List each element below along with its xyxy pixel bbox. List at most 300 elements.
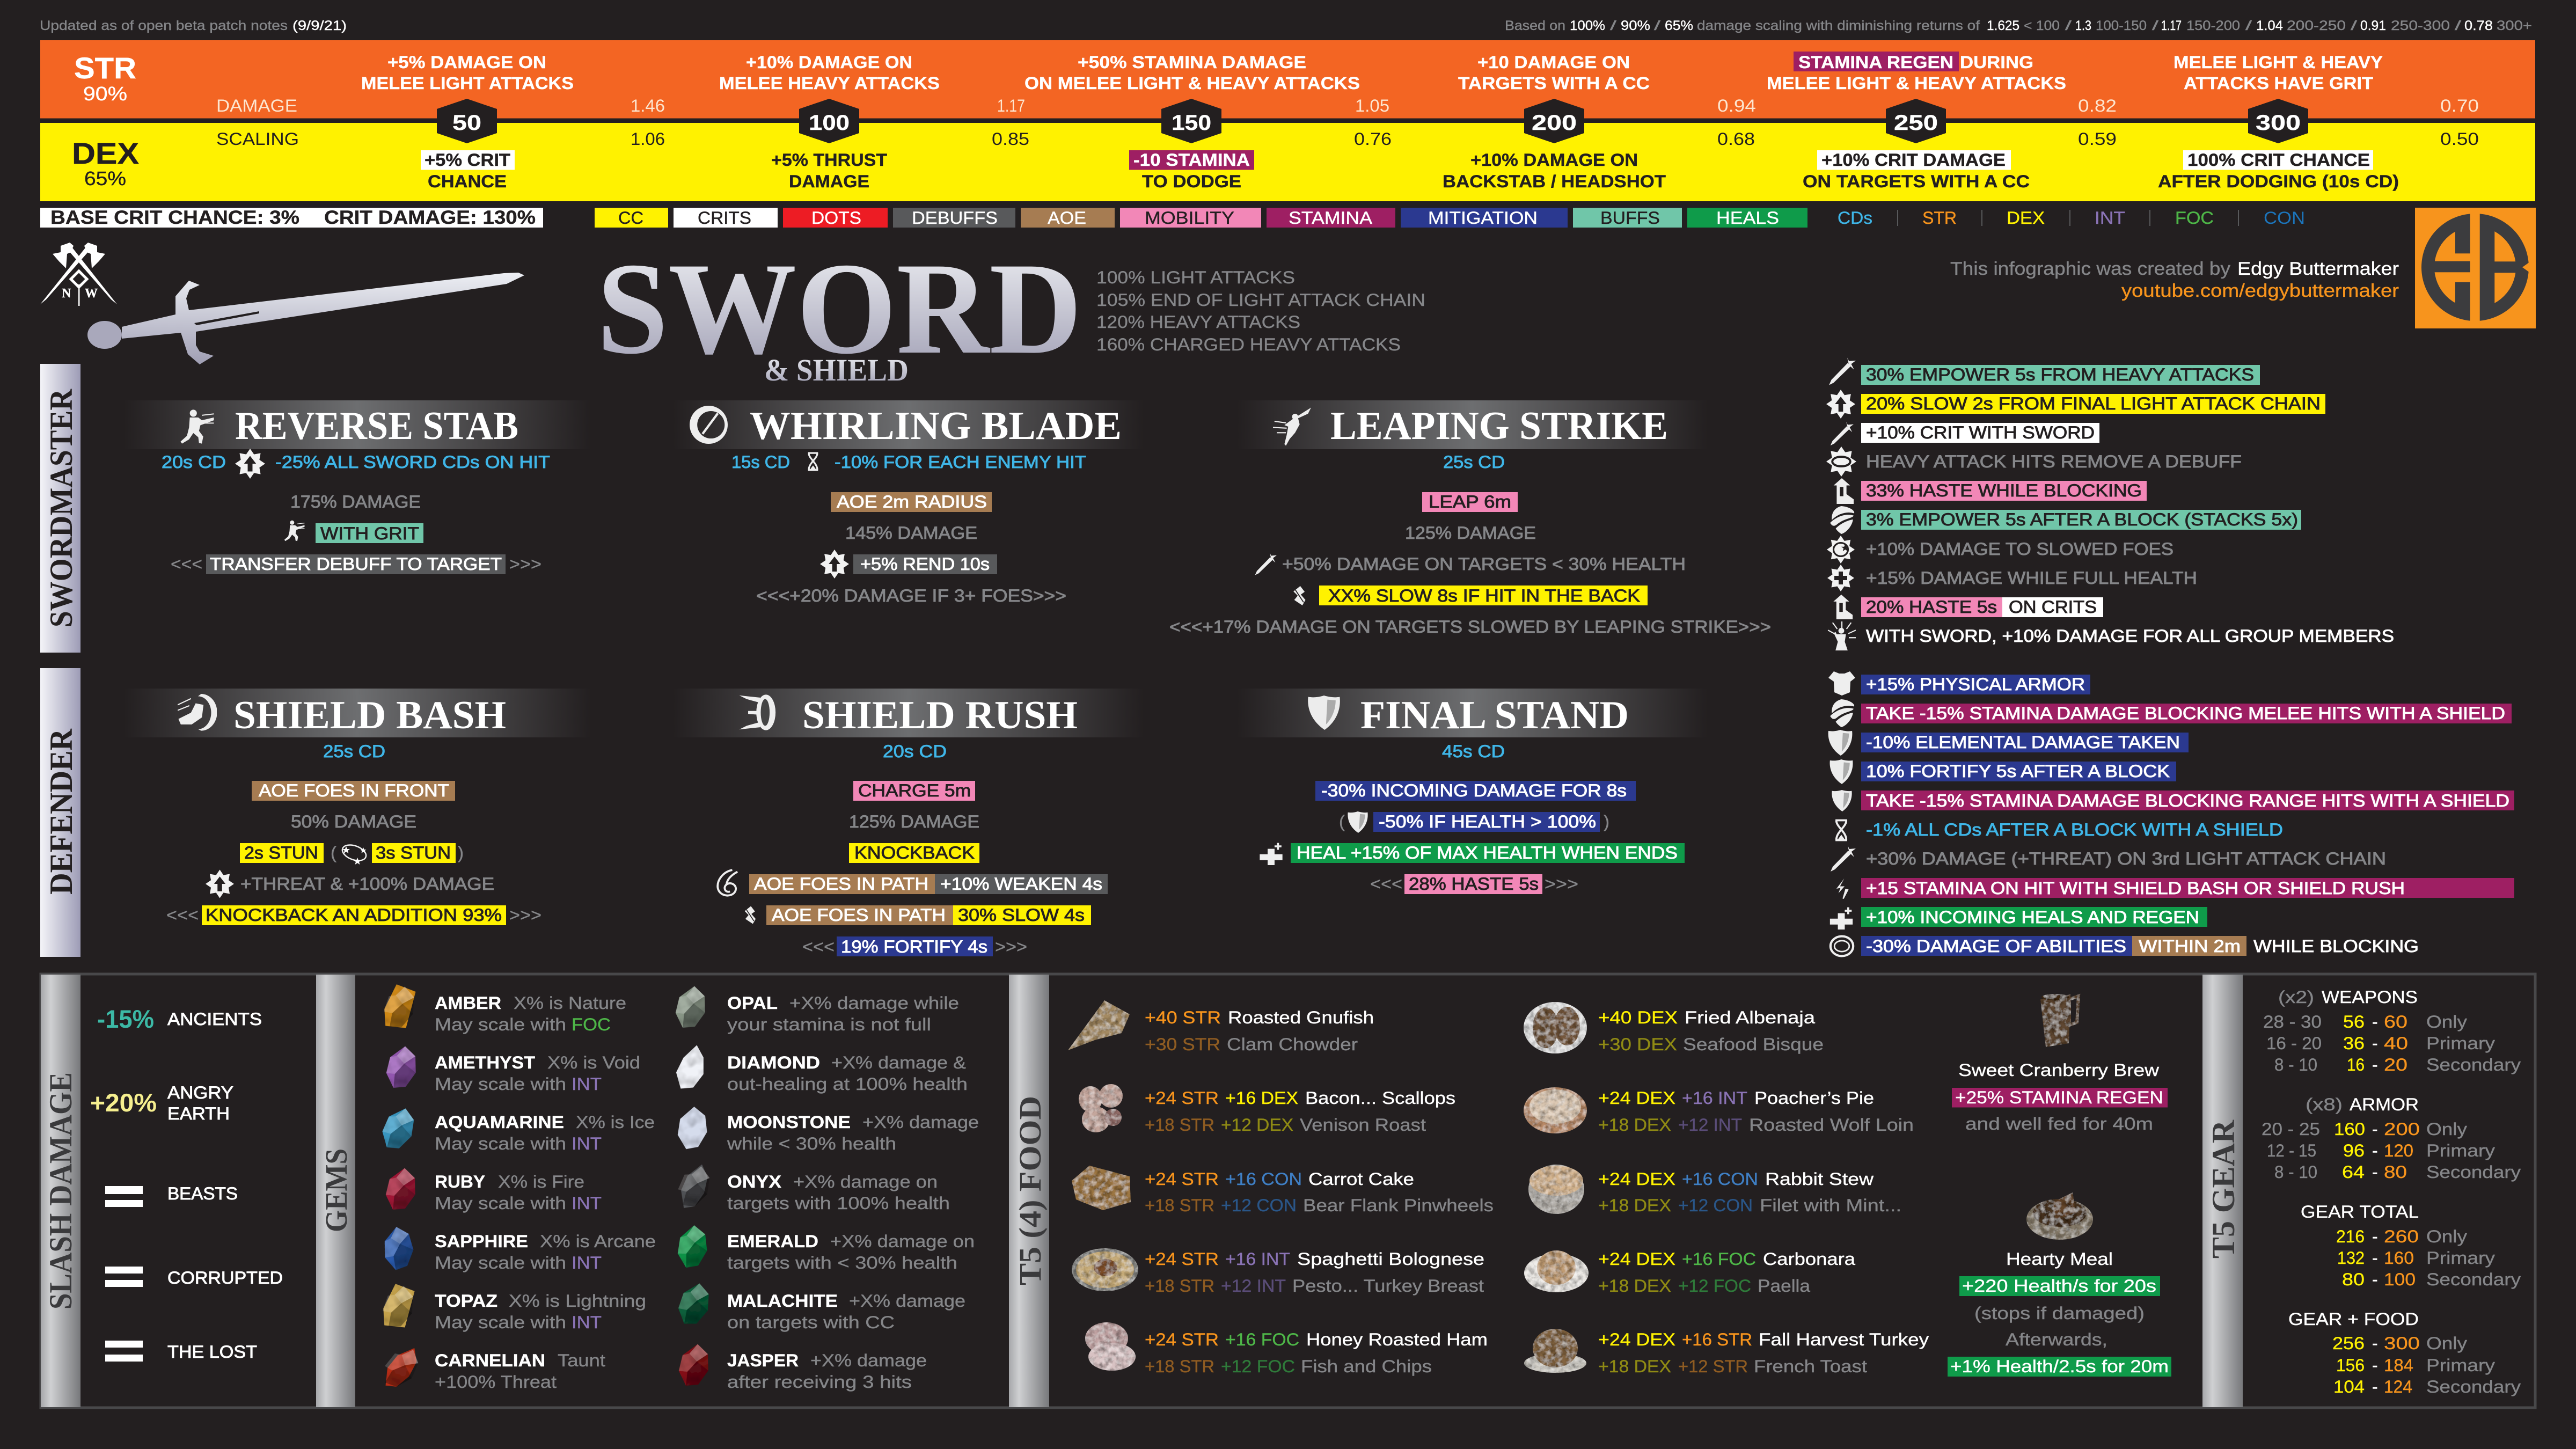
cooldown: 45s CD bbox=[1442, 742, 1505, 761]
gem: diamond: DIAMOND bbox=[727, 1053, 820, 1072]
food row 1 left: +30 STR bbox=[1145, 1035, 1220, 1054]
food row 1 right bbox=[1598, 1008, 1824, 1054]
gear: total: 216 bbox=[2336, 1227, 2365, 1246]
base crit stats: BASE CRIT CHANCE: 3% bbox=[50, 207, 299, 228]
icon: leaping strike bbox=[1273, 408, 1311, 445]
charge line: CHARGE 5m bbox=[858, 781, 971, 800]
gem: sapphire: INT bbox=[572, 1253, 602, 1272]
DEX bonus 150 bbox=[1129, 150, 1254, 191]
gem: amethyst: AMETHYST bbox=[435, 1053, 535, 1072]
fortify line bbox=[802, 936, 1027, 956]
passive: melee stamina block bbox=[1830, 699, 2512, 727]
food row 3 left: +18 STR bbox=[1145, 1196, 1214, 1215]
gear: total: 100 bbox=[2384, 1270, 2416, 1289]
high health line bbox=[1339, 811, 1609, 833]
damage scaling note: / bbox=[1610, 18, 1616, 33]
food row 5 right: +18 DEX bbox=[1598, 1357, 1671, 1376]
upgrade line: <<<+17% DAMAGE ON TARGETS SLOWED BY LEAPING STRIKE>>> bbox=[1169, 617, 1771, 636]
hexagon 300 bbox=[2248, 99, 2308, 143]
DEX bonus 300: 100% CRIT CHANCE bbox=[2187, 150, 2370, 170]
gem: emerald bbox=[677, 1224, 975, 1272]
DEX label bbox=[72, 136, 139, 189]
gear: plus food: - bbox=[2372, 1377, 2378, 1396]
gem: amethyst: X% is Void bbox=[547, 1053, 640, 1072]
passive: crit with sword bbox=[1831, 422, 2099, 445]
gem: malachite: +X% damage bbox=[849, 1291, 965, 1311]
gem: aquamarine bbox=[378, 1104, 655, 1154]
gear: armor: Only bbox=[2426, 1119, 2467, 1139]
DEX bonus 200: +10% DAMAGE ON bbox=[1470, 150, 1638, 170]
STR bonus 300: MELEE LIGHT & HEAVY bbox=[2174, 53, 2383, 72]
gear: weapons: 20 bbox=[2384, 1055, 2407, 1074]
sweet cranberry brew bbox=[1952, 1060, 2168, 1133]
damage line: 175% DAMAGE bbox=[290, 492, 421, 511]
gem: amethyst: May scale with bbox=[435, 1074, 566, 1094]
food row 5 left: +18 STR bbox=[1145, 1357, 1214, 1376]
passive: elemental damage: -10% ELEMENTAL DAMAGE TAKEN bbox=[1866, 733, 2180, 752]
haste line bbox=[1370, 874, 1578, 894]
damage scaling note: 100-150 bbox=[2096, 18, 2147, 33]
STR bonus 150: +50% STAMINA DAMAGE bbox=[1078, 53, 1306, 72]
gear: armor: 8 - 10 bbox=[2274, 1162, 2317, 1182]
food row 5 left: +24 STR bbox=[1145, 1330, 1219, 1349]
hexagon 200 bbox=[1524, 99, 1584, 143]
sweet cranberry brew: and well fed for 40m bbox=[1965, 1114, 2153, 1133]
gear: plus food: 256 bbox=[2332, 1334, 2365, 1353]
knockback line bbox=[166, 905, 541, 925]
food row 4 left: Spaghetti Bolognese bbox=[1297, 1249, 1484, 1269]
row: corrupted bbox=[105, 1267, 283, 1287]
hexagon 150 bbox=[1161, 99, 1221, 143]
food row 4 left: +12 INT bbox=[1221, 1276, 1286, 1296]
hexagon 250 bbox=[1886, 99, 1946, 143]
food row 2 left: +24 STR bbox=[1145, 1088, 1219, 1108]
gear: total: - bbox=[2372, 1248, 2378, 1268]
DEX bonus 100: DAMAGE bbox=[789, 172, 869, 191]
heal line: HEAL +15% OF MAX HEALTH WHEN ENDS bbox=[1297, 843, 1678, 862]
panel: DEX attribute band bbox=[40, 123, 2535, 201]
damage scaling note: 300+ bbox=[2497, 18, 2532, 33]
DEX bonus 300: AFTER DODGING (10s CD) bbox=[2158, 172, 2399, 191]
gem: onyx: ONYX bbox=[727, 1172, 782, 1191]
DEX bonus 250: ON TARGETS WITH A CC bbox=[1803, 172, 2030, 191]
food row 4 right: +16 FOC bbox=[1682, 1249, 1756, 1269]
hearty meal text: +220 Health/s for 20s bbox=[1962, 1276, 2156, 1296]
food row 2 left: +16 DEX bbox=[1225, 1088, 1298, 1108]
food row 4 left bbox=[1145, 1249, 1484, 1296]
gear: plus food: GEAR + FOOD bbox=[2288, 1309, 2419, 1329]
row: the lost: THE LOST bbox=[167, 1342, 257, 1362]
gem: malachite bbox=[675, 1280, 965, 1332]
food row 5 left: +16 FOC bbox=[1225, 1330, 1299, 1349]
hexagon 50: 50 bbox=[452, 111, 481, 135]
food row 1 left bbox=[1145, 1008, 1374, 1054]
passive: damage full health: +15% DAMAGE WHILE FULL HEALTH bbox=[1866, 568, 2197, 588]
row: ancients: ANCIENTS bbox=[167, 1009, 262, 1029]
food row 1 left: +40 STR bbox=[1145, 1008, 1221, 1027]
tab: food bbox=[1009, 975, 1049, 1407]
gear: armor: Primary bbox=[2426, 1141, 2495, 1160]
STR bonus 250: DURING bbox=[1960, 53, 2033, 72]
panel: slash damage bbox=[41, 975, 283, 1407]
icon: poacher's pie bbox=[1524, 1087, 1587, 1133]
scaling values: 0.76 bbox=[1354, 129, 1392, 149]
aoe radius: AOE 2m RADIUS bbox=[837, 492, 987, 511]
stun line: 3s STUN bbox=[376, 843, 451, 862]
food row 2 left: Venison Roast bbox=[1300, 1115, 1426, 1135]
gem: emerald: +X% damage on bbox=[830, 1232, 975, 1251]
gem: ruby: INT bbox=[572, 1194, 602, 1213]
gem: carnelian: Taunt bbox=[558, 1351, 605, 1370]
knockback line: <<< bbox=[166, 905, 199, 925]
icon: New World logo: N bbox=[62, 287, 71, 301]
colour legend: CDs bbox=[1838, 208, 1872, 228]
DEX bonus 300 bbox=[2158, 150, 2399, 191]
colour legend: STR bbox=[1922, 208, 1957, 228]
icon: EB logo bbox=[2415, 208, 2536, 328]
gem: aquamarine: INT bbox=[572, 1134, 602, 1153]
gem: aquamarine: May scale with bbox=[435, 1134, 566, 1153]
haste line: 28% HASTE 5s bbox=[1409, 874, 1539, 894]
damage scaling note: 150-200 bbox=[2186, 18, 2240, 33]
gear: total: GEAR TOTAL bbox=[2301, 1202, 2419, 1221]
gear: armor: 64 bbox=[2342, 1162, 2365, 1182]
damage values: 1.05 bbox=[1355, 96, 1389, 115]
damage line: 125% DAMAGE bbox=[849, 812, 979, 831]
icon: whirling blade bbox=[690, 406, 728, 444]
DEX bonus 200: BACKSTAB / HEADSHOT bbox=[1443, 172, 1666, 191]
skill: Whirling Blade bbox=[673, 400, 1144, 605]
gem: ruby: X% is Fire bbox=[498, 1172, 584, 1191]
damage scaling note: < 100 bbox=[2024, 18, 2060, 33]
gem: ruby: RUBY bbox=[435, 1172, 485, 1191]
gear: weapons: 8 - 10 bbox=[2274, 1055, 2317, 1074]
passive: fortify after block: 10% FORTIFY 5s AFTER A BLOCK bbox=[1866, 762, 2170, 781]
STR bonus 50: MELEE LIGHT ATTACKS bbox=[361, 74, 574, 93]
gear: armor: (x8) bbox=[2306, 1095, 2343, 1114]
tab: SWORDMASTER: SWORDMASTER bbox=[43, 389, 79, 627]
food row 3 left: Carrot Cake bbox=[1308, 1169, 1414, 1189]
damage scaling note: Based on bbox=[1505, 18, 1565, 33]
gear: plus food: 124 bbox=[2384, 1377, 2412, 1396]
gear: armor bbox=[2262, 1095, 2521, 1182]
hexagon 250: 250 bbox=[1894, 111, 1938, 135]
stun line: ( bbox=[331, 843, 336, 862]
heading: Shield Rush: SHIELD RUSH bbox=[802, 693, 1078, 737]
damage scaling note: 90% bbox=[1621, 18, 1650, 33]
STR bonus 50 bbox=[361, 53, 574, 93]
passive: haste while blocking bbox=[1834, 478, 2147, 504]
damage scaling note: 1.625 bbox=[1987, 18, 2019, 33]
gem: emerald: targets with < 30% health bbox=[727, 1253, 957, 1272]
passive: cds after block: -1% ALL CDs AFTER A BLOCK WITH A SHIELD bbox=[1866, 820, 2283, 839]
update note: (9/9/21) bbox=[292, 18, 347, 33]
damage values: 1.17 bbox=[997, 96, 1025, 115]
food row 1 right: Seafood Bisque bbox=[1683, 1035, 1824, 1054]
row: beasts: BEASTS bbox=[167, 1184, 238, 1203]
food row 3 right: +12 CON bbox=[1678, 1196, 1753, 1215]
food row 2 left bbox=[1145, 1088, 1455, 1135]
scaling values: 1.06 bbox=[631, 129, 665, 149]
row: ancients bbox=[97, 1005, 262, 1033]
gear: armor: 80 bbox=[2384, 1162, 2407, 1182]
grit line: WITH GRIT bbox=[320, 524, 419, 543]
food row 5 left bbox=[1145, 1330, 1488, 1376]
icon: scallops bbox=[1079, 1084, 1123, 1132]
damage scaling note: 1.3 bbox=[2075, 18, 2091, 33]
gear: total: - bbox=[2372, 1227, 2378, 1246]
high health line: ( bbox=[1339, 812, 1345, 831]
colour legend: MITIGATION bbox=[1428, 208, 1538, 228]
passive: haste on crits: ON CRITS bbox=[2009, 597, 2097, 617]
food row 3 right: +18 DEX bbox=[1598, 1196, 1671, 1215]
gear: plus food: 300 bbox=[2384, 1334, 2420, 1353]
skill: Final Stand bbox=[1237, 689, 1708, 894]
gem: sapphire: X% is Arcane bbox=[540, 1232, 656, 1251]
gem: amber bbox=[380, 983, 626, 1034]
STR label bbox=[74, 51, 136, 105]
icon: carbonara bbox=[1524, 1250, 1589, 1292]
fortify line: >>> bbox=[995, 937, 1027, 956]
hexagon 150: 150 bbox=[1172, 111, 1211, 135]
gear: total: 160 bbox=[2384, 1248, 2414, 1268]
hearty meal text bbox=[1948, 1249, 2171, 1377]
tab: DEFENDER bbox=[40, 668, 80, 957]
food row 4 left: +18 STR bbox=[1145, 1276, 1214, 1296]
damage scaling note: / bbox=[2245, 18, 2252, 33]
gear: plus food: Only bbox=[2426, 1334, 2467, 1353]
icon: ham bbox=[1085, 1322, 1136, 1371]
food row 5 right bbox=[1598, 1330, 1929, 1376]
gear: weapons: 40 bbox=[2384, 1034, 2408, 1053]
damage scaling note: / bbox=[2065, 18, 2072, 33]
STR bonus 200 bbox=[1458, 53, 1650, 93]
DEX bonus 100 bbox=[771, 150, 887, 191]
gear: total: Secondary bbox=[2426, 1270, 2521, 1289]
food row 2 right bbox=[1598, 1088, 1914, 1135]
damage line: 125% DAMAGE bbox=[1405, 523, 1536, 543]
gear: plus food bbox=[2288, 1309, 2521, 1396]
food row 2 right: Roasted Wolf Loin bbox=[1749, 1115, 1914, 1135]
food row 4 right: Carbonara bbox=[1763, 1249, 1855, 1269]
gem: malachite: MALACHITE bbox=[727, 1291, 838, 1311]
damage scaling note bbox=[1505, 18, 2532, 33]
skill: Shield Bash bbox=[123, 689, 591, 925]
food row 1 right: +30 DEX bbox=[1598, 1035, 1677, 1054]
STR bonus 200: TARGETS WITH A CC bbox=[1458, 74, 1650, 93]
gear: weapons: 28 - 30 bbox=[2263, 1012, 2322, 1031]
gem: opal: OPAL bbox=[727, 993, 778, 1013]
food row 5 left: Honey Roasted Ham bbox=[1306, 1330, 1488, 1349]
DEX bonus 250 bbox=[1803, 150, 2030, 191]
tab: slash damage bbox=[41, 975, 80, 1407]
DEX bonus 150: TO DODGE bbox=[1142, 172, 1241, 191]
colour legend: DOTS bbox=[811, 208, 861, 228]
icon: New World logo: W bbox=[85, 287, 98, 301]
row: angry earth: ANGRY bbox=[167, 1083, 233, 1102]
STR label: STR bbox=[74, 51, 136, 85]
gear: armor: 200 bbox=[2384, 1119, 2420, 1139]
bottom frame bbox=[41, 974, 2535, 1408]
slow line: XX% SLOW 8s IF HIT IN THE BACK bbox=[1328, 586, 1640, 605]
passive: remove a debuff bbox=[1826, 447, 2242, 477]
scaling row label: SCALING bbox=[216, 129, 299, 149]
food row 5 right: +16 STR bbox=[1682, 1330, 1752, 1349]
gem: diamond: +X% damage & bbox=[831, 1053, 966, 1072]
haste line: >>> bbox=[1545, 874, 1578, 894]
hexagon 100 bbox=[799, 99, 859, 143]
gear: armor: 20 - 25 bbox=[2262, 1119, 2320, 1139]
food row 5 right: +24 DEX bbox=[1598, 1330, 1675, 1349]
gear: armor: - bbox=[2372, 1119, 2378, 1139]
rend line: +5% REND 10s bbox=[860, 554, 990, 574]
cooldown: -25% ALL SWORD CDs ON HIT bbox=[275, 452, 550, 472]
credit: This infographic was created by bbox=[1950, 259, 2230, 279]
food row 3 right bbox=[1598, 1169, 1901, 1215]
food row 2 right: Poacher’s Pie bbox=[1754, 1088, 1874, 1108]
heading: Reverse Stab: REVERSE STAB bbox=[235, 404, 518, 448]
hearty meal text: (stops if damaged) bbox=[1974, 1304, 2145, 1323]
row: angry earth: EARTH bbox=[167, 1104, 230, 1123]
gem: moonstone bbox=[677, 1106, 979, 1153]
gear: weapons: 16 - 20 bbox=[2266, 1034, 2322, 1053]
hearty meal text: +1% Health/2.5s for 20m bbox=[1950, 1357, 2169, 1376]
gem: jasper: +X% damage bbox=[810, 1351, 927, 1370]
gem: onyx: targets with 100% health bbox=[727, 1194, 950, 1213]
damage scaling note: 100% bbox=[1570, 18, 1605, 33]
STR bonus 100: MELEE HEAVY ATTACKS bbox=[719, 74, 940, 93]
STR bonus 100: +10% DAMAGE ON bbox=[746, 53, 912, 72]
passive: group damage: WITH SWORD, +10% DAMAGE FOR ALL GROUP MEMBERS bbox=[1866, 626, 2394, 646]
STR bonus 50: +5% DAMAGE ON bbox=[387, 53, 546, 72]
aoe line: AOE FOES IN FRONT bbox=[259, 781, 449, 800]
STR bonus 300 bbox=[2174, 53, 2383, 93]
sweet cranberry brew: Sweet Cranberry Brew bbox=[1958, 1060, 2160, 1080]
passive: remove a debuff: HEAVY ATTACK HITS REMOVE A DEBUFF bbox=[1866, 452, 2242, 471]
STR bonus 250: MELEE LIGHT & HEAVY ATTACKS bbox=[1767, 74, 2066, 93]
icon: sword bbox=[87, 273, 524, 364]
damage scaling note: damage scaling with diminishing returns of bbox=[1697, 18, 1980, 33]
gem: moonstone: MOONSTONE bbox=[727, 1113, 851, 1132]
gem: carnelian: CARNELIAN bbox=[435, 1351, 545, 1370]
gem: amber: May scale with bbox=[435, 1015, 566, 1034]
row: corrupted: CORRUPTED bbox=[167, 1268, 283, 1287]
gem: diamond: out-healing at 100% health bbox=[727, 1074, 968, 1094]
weaken line: AOE FOES IN PATH bbox=[754, 874, 928, 894]
gear: armor: - bbox=[2372, 1162, 2378, 1182]
food row 2 left: +12 DEX bbox=[1221, 1115, 1293, 1135]
gear: plus food: 184 bbox=[2384, 1356, 2413, 1375]
panel: STR attribute band bbox=[40, 40, 2535, 118]
STR label: 90% bbox=[83, 83, 127, 105]
icon: New World logo bbox=[40, 243, 117, 306]
gear: armor: 160 bbox=[2334, 1119, 2365, 1139]
DEX label: DEX bbox=[72, 136, 139, 170]
food row 4 right: +18 DEX bbox=[1598, 1276, 1671, 1296]
damage row label: DAMAGE bbox=[216, 96, 297, 115]
weaken line: +10% WEAKEN 4s bbox=[940, 874, 1102, 894]
icon: turkey bbox=[1524, 1329, 1586, 1373]
gear: total: 80 bbox=[2342, 1270, 2365, 1289]
gear: total: Primary bbox=[2426, 1248, 2495, 1268]
weapon attack stats: 100% LIGHT ATTACKS bbox=[1096, 268, 1295, 287]
damage scaling note: / bbox=[2351, 18, 2357, 33]
STR bonus 100 bbox=[719, 53, 940, 93]
damage scaling note: 0.91 bbox=[2360, 18, 2386, 33]
icon: bolognese bbox=[1072, 1248, 1138, 1291]
gear: armor: - bbox=[2372, 1141, 2378, 1160]
damage values: 0.82 bbox=[2078, 96, 2117, 115]
colour legend: DEBUFFS bbox=[912, 208, 998, 228]
damage values: 0.70 bbox=[2440, 96, 2479, 115]
icon: shield bash bbox=[178, 694, 217, 731]
row: ancients: -15% bbox=[97, 1005, 154, 1033]
slow line: AOE FOES IN PATH bbox=[772, 905, 946, 925]
damage line: 145% DAMAGE bbox=[845, 523, 977, 543]
food row 2 right: +12 INT bbox=[1678, 1115, 1742, 1135]
food row 3 left bbox=[1145, 1169, 1494, 1215]
knockback: KNOCKBACK bbox=[854, 843, 975, 862]
panel: gems bbox=[316, 975, 979, 1407]
fortify line: 19% FORTIFY 4s bbox=[841, 937, 987, 956]
colour legend: FOC bbox=[2175, 208, 2214, 228]
food row 2 left: Bacon... Scallops bbox=[1305, 1088, 1455, 1108]
haste line: <<< bbox=[1370, 874, 1402, 894]
gem: sapphire: SAPPHIRE bbox=[435, 1232, 528, 1251]
gem: diamond bbox=[672, 1042, 968, 1094]
gem: opal: your stamina is not full bbox=[727, 1015, 931, 1034]
cooldown: 20s CD bbox=[883, 742, 947, 761]
passive: physical armor: +15% PHYSICAL ARMOR bbox=[1866, 675, 2085, 694]
colour legend: BUFFS bbox=[1600, 208, 1660, 228]
stun line: 2s STUN bbox=[244, 843, 318, 862]
icon: brew mug bbox=[2040, 994, 2079, 1047]
scaling values: 0.68 bbox=[1717, 129, 1755, 149]
stun line bbox=[240, 842, 464, 865]
gem: ruby bbox=[383, 1166, 602, 1213]
food row 4 right: +24 DEX bbox=[1598, 1249, 1675, 1269]
gem: sapphire bbox=[383, 1226, 656, 1272]
scaling values: 0.50 bbox=[2440, 129, 2479, 149]
DEX label: 65% bbox=[84, 167, 126, 189]
passive: aoe damage reduction: -30% DAMAGE OF ABILITIES bbox=[1866, 936, 2126, 956]
transfer debuff line: <<< bbox=[171, 554, 202, 574]
gem: moonstone: while < 30% health bbox=[727, 1134, 896, 1153]
colour legend: MOBILITY bbox=[1145, 208, 1234, 228]
food row 3 right: Rabbit Stew bbox=[1765, 1169, 1874, 1189]
scaling values: 0.85 bbox=[992, 129, 1029, 149]
hexagon 300: 300 bbox=[2256, 111, 2301, 135]
passive: haste on crits: 20% HASTE 5s bbox=[1866, 597, 1997, 617]
gem: amethyst: INT bbox=[572, 1074, 602, 1094]
passive: third light attack: +30% DAMAGE (+THREAT) ON 3rd LIGHT ATTACK CHAIN bbox=[1866, 849, 2386, 868]
hearty meal text: Hearty Meal bbox=[2006, 1249, 2113, 1269]
gem: carnelian: +100% Threat bbox=[435, 1372, 557, 1392]
passive: empower from heavy bbox=[1829, 358, 2260, 385]
damage values: 0.94 bbox=[1717, 96, 1756, 115]
colour legend bbox=[595, 208, 2305, 228]
update note: Updated as of open beta patch notes bbox=[40, 18, 288, 33]
food row 1 right: Fried Albenaja bbox=[1685, 1008, 1815, 1027]
passive: incoming heals: +10% INCOMING HEALS AND REGEN bbox=[1866, 908, 2199, 927]
gem: sapphire: May scale with bbox=[435, 1253, 566, 1272]
cooldown: 20s CD bbox=[162, 452, 226, 472]
passive: stamina on hit: +15 STAMINA ON HIT WITH SHIELD BASH OR SHIELD RUSH bbox=[1866, 879, 2405, 898]
transfer debuff line: >>> bbox=[509, 554, 541, 574]
gear: plus food: Secondary bbox=[2426, 1377, 2521, 1396]
panel: swordmaster passives bbox=[1826, 358, 2394, 650]
panel: defender passives bbox=[1828, 671, 2514, 956]
